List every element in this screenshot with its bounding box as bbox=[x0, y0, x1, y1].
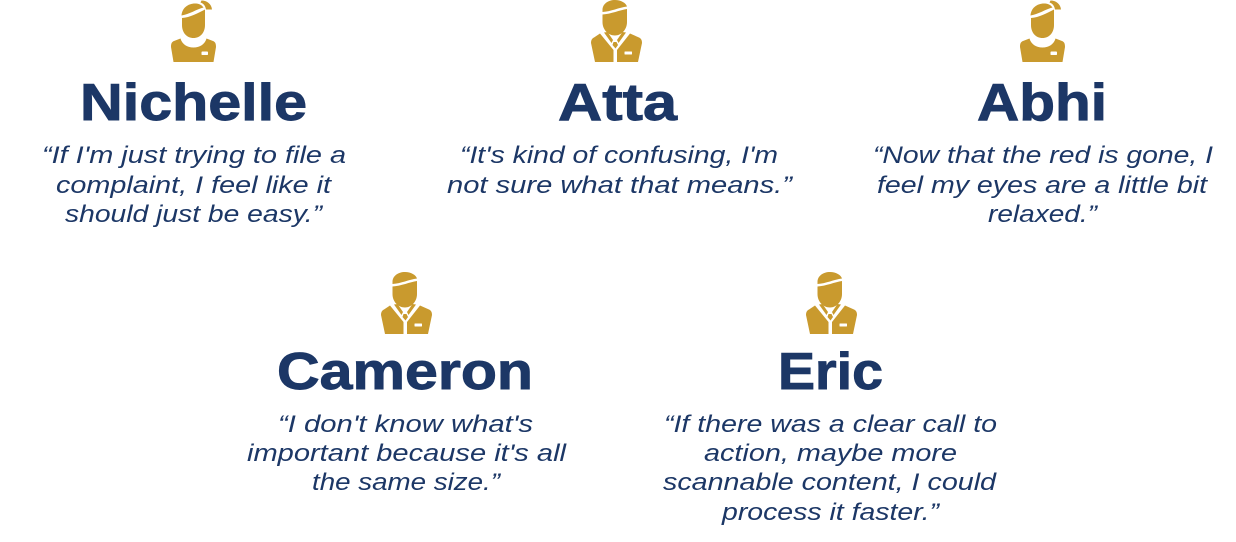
quote: Abhi: “Now that the red is gone, I bbox=[873, 142, 1213, 169]
quote: Atta bbox=[447, 142, 793, 199]
heading: Cameron: Cameron bbox=[277, 343, 533, 401]
icon: Eric avatar bbox=[806, 272, 857, 334]
panel: Cameron bbox=[247, 272, 567, 496]
quote: Abhi bbox=[873, 142, 1213, 228]
panel: Abhi bbox=[873, 0, 1213, 228]
quote: Cameron bbox=[247, 411, 567, 496]
quote: Abhi: relaxed.” bbox=[988, 201, 1098, 228]
quote: Eric: scannable content, I could bbox=[663, 469, 997, 496]
panel: Atta bbox=[447, 0, 793, 199]
quote: Nichelle: “If I'm just trying to file a bbox=[42, 142, 346, 169]
heading: Abhi: Abhi bbox=[977, 74, 1107, 132]
quote: Nichelle: complaint, I feel like it bbox=[56, 172, 333, 199]
quote: Cameron: “I don't know what's bbox=[278, 411, 533, 438]
quote: Atta: not sure what that means.” bbox=[447, 172, 793, 199]
quote: Atta: “It's kind of confusing, I'm bbox=[460, 142, 778, 169]
icon: Abhi avatar bbox=[1020, 0, 1065, 62]
icon: Cameron avatar bbox=[381, 272, 432, 334]
quote: Eric: process it faster.” bbox=[721, 499, 940, 526]
icon: Nichelle avatar bbox=[171, 0, 216, 62]
heading: Eric: Eric bbox=[778, 343, 883, 401]
heading: Atta: Atta bbox=[558, 74, 678, 132]
quote: Cameron: the same size.” bbox=[312, 469, 501, 496]
quote: Eric bbox=[663, 411, 997, 526]
quote: Nichelle bbox=[42, 142, 346, 228]
quote: Eric: action, maybe more bbox=[704, 440, 957, 467]
icon: Atta avatar bbox=[591, 0, 642, 62]
quote: Abhi: feel my eyes are a little bit bbox=[877, 172, 1209, 199]
panel: Eric bbox=[663, 272, 997, 526]
panel: Nichelle bbox=[42, 0, 346, 228]
quote: Eric: “If there was a clear call to bbox=[664, 411, 997, 438]
heading: Nichelle: Nichelle bbox=[80, 74, 307, 132]
quote: Cameron: important because it's all bbox=[247, 440, 567, 467]
quote: Nichelle: should just be easy.” bbox=[65, 201, 323, 228]
